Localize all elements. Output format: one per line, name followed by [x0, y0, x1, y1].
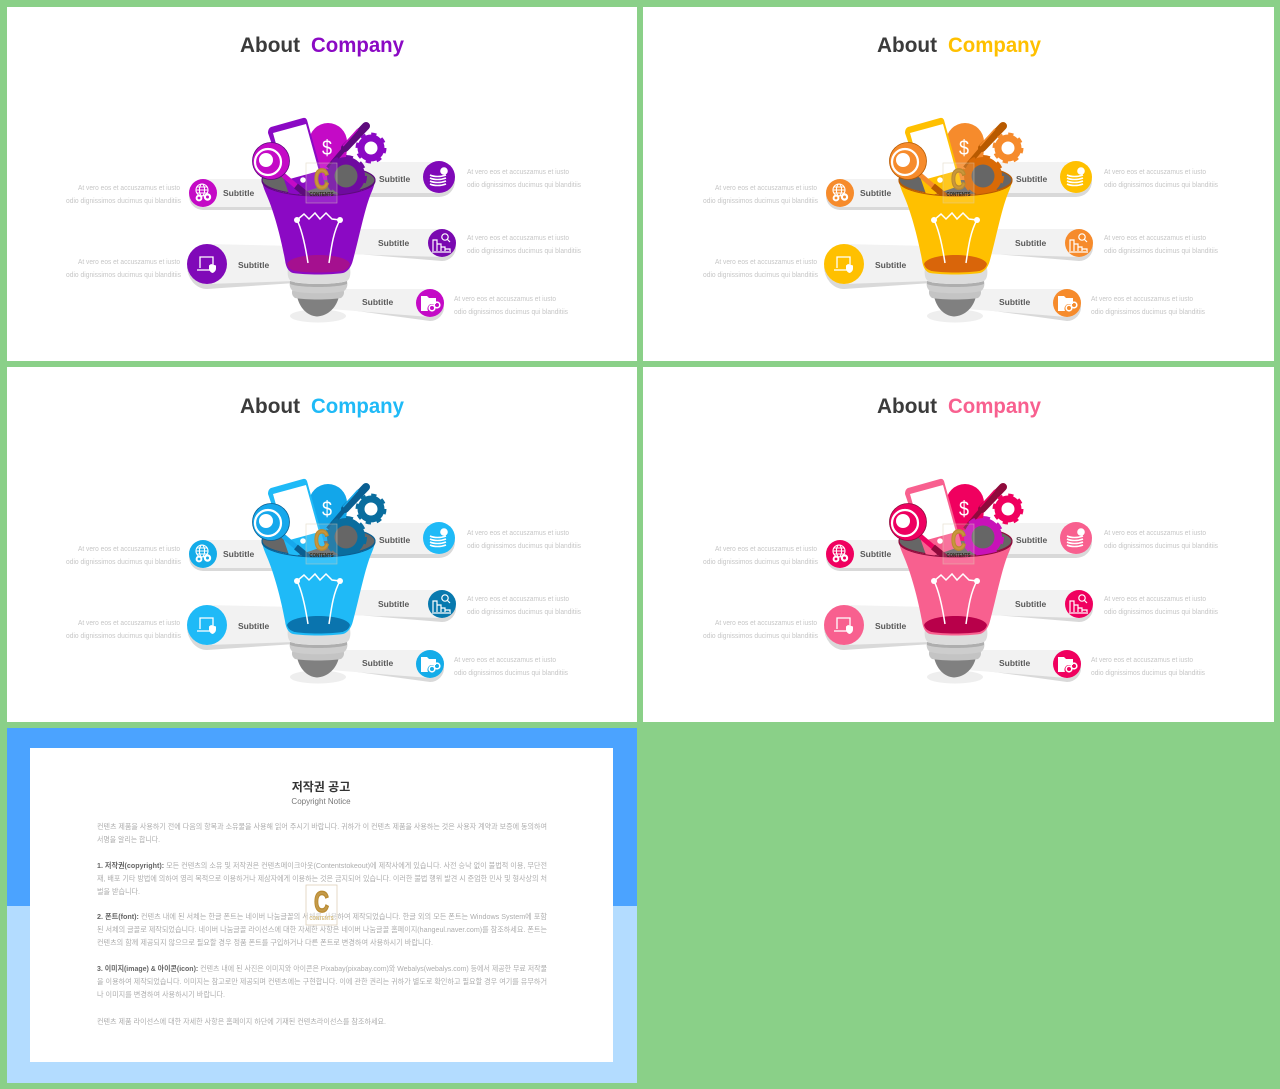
callout: right bottom: At vero eos et accuszamus et iusto [1091, 296, 1193, 303]
notice heading [291, 779, 351, 806]
callout: right middle: At vero eos et accuszamus et iusto [467, 596, 569, 603]
callout: right top: odio dignissimos ducimus qui blanditiis [1104, 182, 1218, 189]
callout: left bottom: At vero eos et accuszamus et iusto [715, 259, 817, 266]
watermark logo: C [314, 525, 329, 557]
callout: left bottom: odio dignissimos ducimus qui blanditiis [66, 633, 181, 640]
callout: right middle: odio dignissimos ducimus qui blanditiis [1104, 609, 1218, 616]
callout: left top [703, 540, 922, 571]
callout: right top: At vero eos et accuszamus et iusto [467, 169, 569, 176]
callout: left bottom: At vero eos et accuszamus et iusto [78, 259, 180, 266]
callout: right middle: odio dignissimos ducimus qui blanditiis [1104, 248, 1218, 255]
title: Company [948, 34, 1041, 57]
watermark logo [306, 524, 337, 564]
callout: right middle: Subtitle [1015, 238, 1046, 248]
section 1: copyright: 재, 배포 기타 방법에 의하여 영리 목적으로 이용하거나 제삼자에게 이용하는 것은 금지되어 있습니다. 이러한 불법 행위 발견 시 준엄한 민사 및 형사상의 처 [97, 874, 547, 883]
callout: right top [999, 522, 1218, 558]
callout: right bottom [965, 289, 1205, 321]
intro paragraph: 컨텐츠 제품을 사용하기 전에 다음의 항목과 소유물을 사용해 읽어 주시기 바랍니다. 귀하가 이 컨텐츠 제품을 사용하는 것은 사용자 계약과 보증에 동의하여 [97, 822, 547, 831]
callout: right middle [982, 590, 1218, 622]
watermark logo: C [314, 886, 329, 919]
title: About [877, 395, 937, 418]
callout: right top [362, 522, 581, 558]
callout: right bottom: Subtitle [362, 297, 393, 307]
watermark logo: C [314, 164, 329, 196]
callout: right top: At vero eos et accuszamus et iusto [1104, 169, 1206, 176]
watermark logo [306, 885, 337, 925]
intro paragraph [97, 822, 547, 844]
callout: right bottom: odio dignissimos ducimus qui blanditiis [454, 309, 568, 316]
callout: left top: At vero eos et accuszamus et iusto [78, 185, 180, 192]
section 1: copyright: 1. 저작권(copyright): 모든 컨텐츠의 소유 및 저작권은 컨텐츠메이크아웃(Contentstokeout)에 제작사에게 있습니다. 사전 승낙 없이 불법적 이용, 무단전 [97, 861, 547, 870]
callout: left bottom: At vero eos et accuszamus et iusto [78, 620, 180, 627]
callout: right top: At vero eos et accuszamus et iusto [467, 530, 569, 537]
icon: light bulb with tools [252, 118, 384, 322]
closing line: 컨텐츠 제품 라이선스에 대한 자세한 사항은 홈페이지 하단에 기재된 컨텐츠라이선스를 참조하세요. [97, 1017, 386, 1026]
section 3: image and icon [97, 964, 547, 999]
panel: yellow slide [643, 7, 1274, 361]
panel: purple slide [7, 7, 637, 361]
title [240, 395, 404, 418]
notice heading: Copyright Notice [291, 797, 351, 806]
watermark logo: C [951, 525, 966, 557]
callout: right middle: odio dignissimos ducimus qui blanditiis [467, 248, 581, 255]
callout: left top: Subtitle [860, 549, 891, 559]
title: Company [311, 395, 404, 418]
callout: right bottom: Subtitle [999, 658, 1030, 668]
callout: right top: Subtitle [1016, 174, 1047, 184]
callout: right top: Subtitle [379, 174, 410, 184]
notice heading: 저작권 공고 [292, 779, 350, 794]
callout: right bottom: Subtitle [362, 658, 393, 668]
callout: left bottom: Subtitle [238, 621, 269, 631]
callout: right bottom [328, 650, 568, 682]
watermark logo [943, 163, 974, 203]
callout: left bottom [66, 244, 295, 289]
callout: left top [66, 540, 285, 571]
section 2: font: 컨텐츠의 함께 제공되지 않으므로 필요할 경우 정품 폰트를 구입하거나 다른 폰트로 변경하여 사용하시기 바랍니다. [97, 938, 433, 947]
callout: right bottom [965, 650, 1205, 682]
section 3: image and icon: 을 이용하여 제작되었습니다. 이미지는 참고로만 제공되며 컨텐츠에는 구현합니다. 이에 관한 권리는 귀하가 별도로 확인하고 필요할 경우 여기를 유무하거 [97, 977, 547, 986]
callout: right bottom: At vero eos et accuszamus et iusto [454, 296, 556, 303]
callout: right top: odio dignissimos ducimus qui blanditiis [1104, 543, 1218, 550]
callout: right middle: At vero eos et accuszamus et iusto [467, 235, 569, 242]
callout: right middle [982, 229, 1218, 261]
callout: left top: Subtitle [223, 188, 254, 198]
callout: right top: odio dignissimos ducimus qui blanditiis [467, 543, 581, 550]
callout: left bottom: odio dignissimos ducimus qui blanditiis [66, 272, 181, 279]
callout: left top: At vero eos et accuszamus et iusto [78, 546, 180, 553]
callout: left bottom: Subtitle [875, 260, 906, 270]
section 1: copyright [97, 861, 547, 896]
icon: light bulb with tools [890, 479, 1022, 684]
watermark logo [943, 524, 974, 564]
watermark logo: C [951, 164, 966, 196]
panel: blue slide [7, 367, 637, 722]
icon: light bulb with tools [890, 118, 1022, 322]
callout: left top: At vero eos et accuszamus et iusto [715, 546, 817, 553]
callout: right top [999, 161, 1218, 197]
callout: right bottom: odio dignissimos ducimus qui blanditiis [454, 670, 568, 677]
callout: right top: odio dignissimos ducimus qui blanditiis [467, 182, 581, 189]
callout: left top: odio dignissimos ducimus qui blanditiis [66, 559, 181, 566]
callout: left top: Subtitle [223, 549, 254, 559]
callout: left bottom: odio dignissimos ducimus qui blanditiis [703, 272, 818, 279]
callout: left bottom [703, 605, 932, 650]
callout: left bottom: At vero eos et accuszamus et iusto [715, 620, 817, 627]
watermark logo [306, 163, 337, 203]
section 2: font: 된 서체의 글꼴로 제작되었습니다. 네이버 나눔글꼴 라이선스에 대한 자세한 사항은 네이버 나눔글꼴 홈페이지(hangeul.naver.com)를 참조하세요. 폰트는 [97, 925, 547, 934]
callout: right middle: Subtitle [378, 238, 409, 248]
title: About [240, 395, 300, 418]
icon: light bulb with tools [252, 479, 384, 684]
title [877, 395, 1041, 418]
title: About [240, 34, 300, 57]
callout: right top [362, 161, 581, 197]
callout: right middle: odio dignissimos ducimus qui blanditiis [467, 609, 581, 616]
watermark logo: CONTENTS [310, 192, 334, 198]
callout: left bottom: Subtitle [875, 621, 906, 631]
callout: right bottom: At vero eos et accuszamus et iusto [1091, 657, 1193, 664]
watermark logo: CONTENTS [946, 192, 971, 198]
callout: right middle [345, 229, 581, 261]
callout: right middle: At vero eos et accuszamus et iusto [1104, 235, 1206, 242]
callout: right middle [345, 590, 581, 622]
callout: left bottom: Subtitle [238, 260, 269, 270]
watermark logo: CONTENTS [310, 553, 334, 559]
title [240, 34, 404, 57]
callout: right bottom: At vero eos et accuszamus et iusto [454, 657, 556, 664]
callout: right top: At vero eos et accuszamus et iusto [1104, 530, 1206, 537]
callout: left bottom [703, 244, 932, 289]
callout: left bottom: odio dignissimos ducimus qui blanditiis [703, 633, 818, 640]
callout: right middle: Subtitle [378, 599, 409, 609]
panel: pink slide [643, 367, 1274, 722]
callout: left top: odio dignissimos ducimus qui blanditiis [703, 198, 818, 205]
title: Company [948, 395, 1041, 418]
callout: left bottom [66, 605, 295, 650]
section 1: copyright: 벌을 받습니다. [97, 887, 140, 896]
callout: right bottom: odio dignissimos ducimus qui blanditiis [1091, 670, 1205, 677]
callout: left top: odio dignissimos ducimus qui blanditiis [66, 198, 181, 205]
watermark logo: CONTENTS [310, 916, 334, 922]
callout: right top: Subtitle [379, 535, 410, 545]
callout: left top: odio dignissimos ducimus qui blanditiis [703, 559, 818, 566]
intro paragraph: 서명을 알리는 합니다. [97, 835, 160, 844]
callout: right middle: Subtitle [1015, 599, 1046, 609]
title: About [877, 34, 937, 57]
section 2: font [97, 912, 547, 947]
callout: left top [703, 179, 922, 210]
callout: left top: At vero eos et accuszamus et iusto [715, 185, 817, 192]
callout: right bottom: odio dignissimos ducimus qui blanditiis [1091, 309, 1205, 316]
panel: copyright notice [7, 728, 637, 1083]
callout: right bottom: Subtitle [999, 297, 1030, 307]
section 2: font: 2. 폰트(font): 컨텐츠 내에 된 서체는 한글 폰트는 네이버 나눔글꼴의 서체를 사용하여 제작되었습니다. 한글 외의 모든 폰트는 Windows System에 포함 [97, 912, 547, 921]
section 3: image and icon: 3. 이미지(image) & 아이콘(icon): 컨텐츠 내에 된 사진은 이미지와 아이콘은 Pixabay(pixabay.com)와 Webalys(webalys.com) 등에서 제공한 무료 저작물 [97, 964, 547, 973]
callout: right middle: At vero eos et accuszamus et iusto [1104, 596, 1206, 603]
callout: left top [66, 179, 285, 210]
callout: left top: Subtitle [860, 188, 891, 198]
callout: right bottom [328, 289, 568, 321]
title: Company [311, 34, 404, 57]
section 3: image and icon: 나 이미지를 변경하여 사용하시기 바랍니다. [97, 990, 225, 999]
watermark logo: CONTENTS [946, 553, 971, 559]
title [877, 34, 1041, 57]
callout: right top: Subtitle [1016, 535, 1047, 545]
